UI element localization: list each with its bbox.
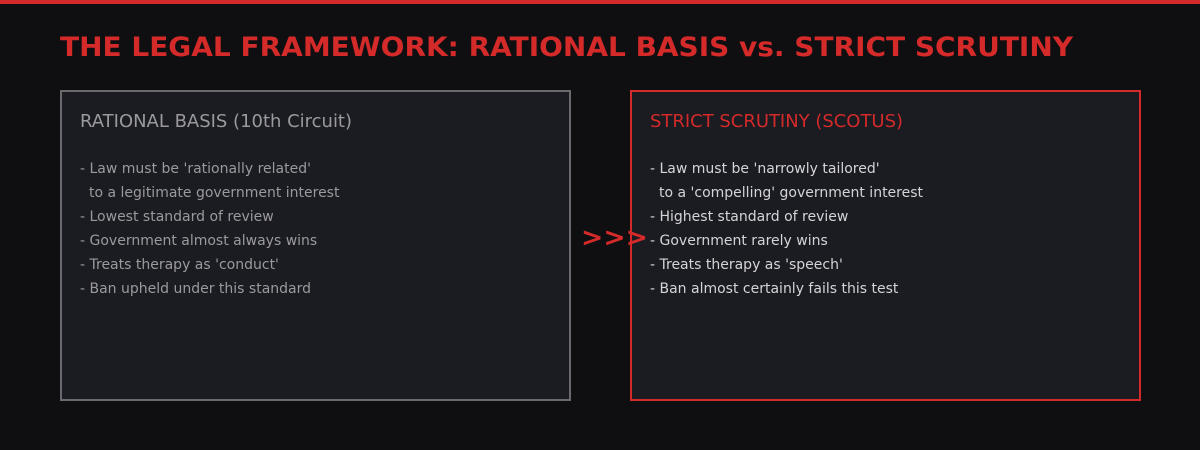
bullet list: rational basis: - Ban upheld under this standard xyxy=(80,281,311,297)
bullet list: rational basis xyxy=(80,161,340,297)
bullet list: strict scrutiny: to a 'compelling' government interest xyxy=(659,185,924,201)
bullet list: strict scrutiny: - Ban almost certainly fails this test xyxy=(650,281,899,297)
heading: rational basis: RATIONAL BASIS (10th Circuit) xyxy=(80,111,352,132)
bullet list: rational basis: - Treats therapy as 'conduct' xyxy=(80,257,279,273)
bullet list: strict scrutiny: - Highest standard of review xyxy=(650,209,848,225)
bullet list: rational basis: - Government almost always wins xyxy=(80,233,317,249)
bullet list: rational basis: - Law must be 'rationally related' xyxy=(80,161,311,177)
bullet list: rational basis: - Lowest standard of review xyxy=(80,209,274,225)
bullet list: strict scrutiny: - Law must be 'narrowly tailored' xyxy=(650,161,880,177)
bullet list: strict scrutiny xyxy=(650,161,924,297)
panel: rational basis xyxy=(61,91,570,400)
heading: strict scrutiny: STRICT SCRUTINY (SCOTUS) xyxy=(650,111,903,132)
bullet list: rational basis: to a legitimate government interest xyxy=(89,185,340,201)
bullet list: strict scrutiny: - Treats therapy as 'speech' xyxy=(650,257,843,273)
top accent bar xyxy=(0,0,1200,4)
bullet list: strict scrutiny: - Government rarely wins xyxy=(650,233,828,249)
title: THE LEGAL FRAMEWORK: RATIONAL BASIS vs. STRICT SCRUTINY xyxy=(60,32,1073,63)
arrow: >>> xyxy=(581,223,648,253)
panel: strict scrutiny xyxy=(631,91,1140,400)
